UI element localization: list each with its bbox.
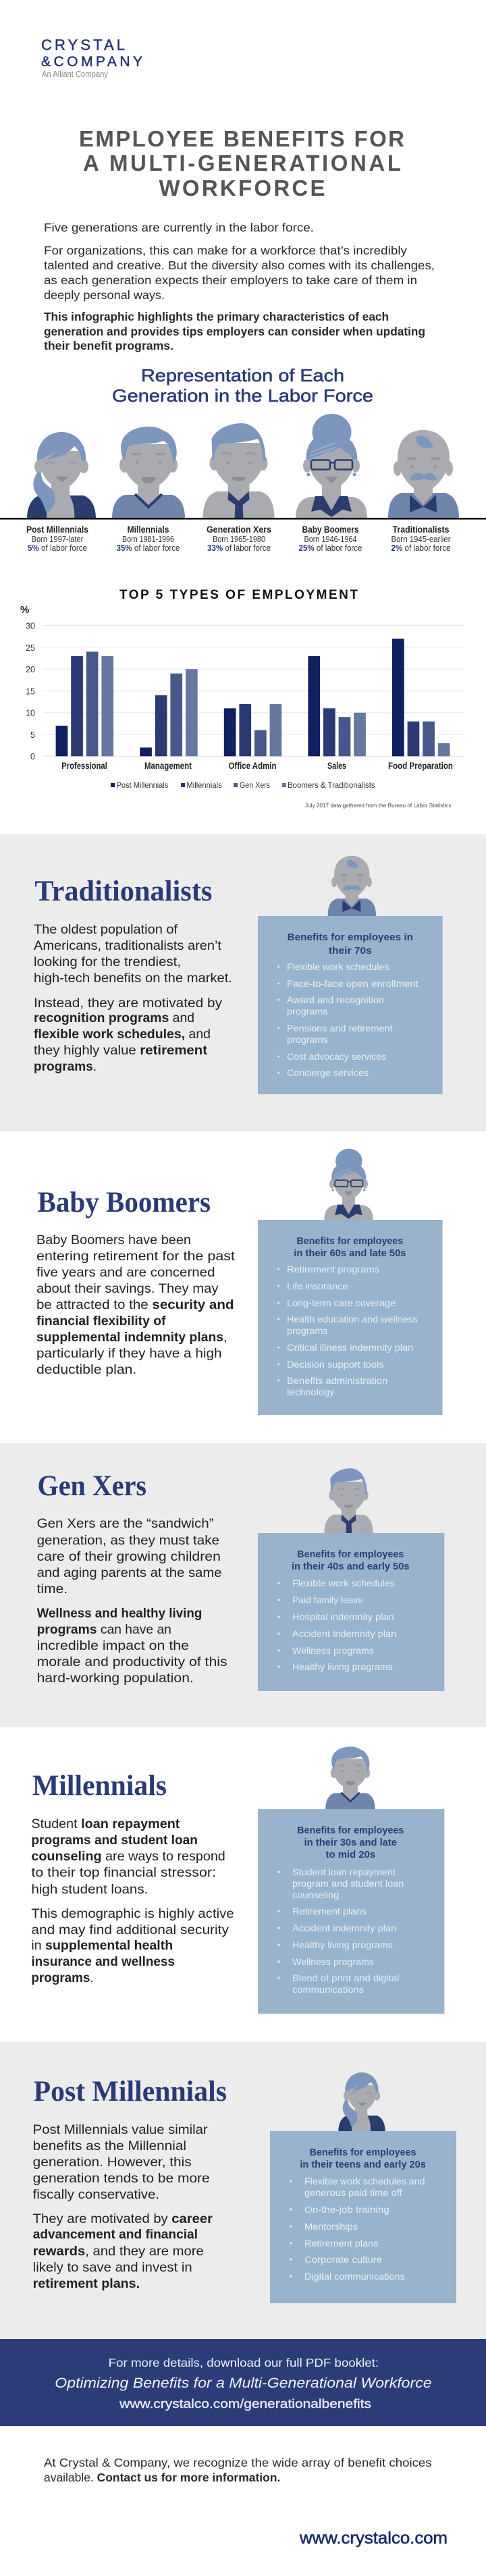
text: millennials description [31,1817,234,1985]
bar chart: top 5 types of employment: 30 [26,621,35,630]
text: post millennials description: Post Millennials value similar [33,2122,208,2137]
intro text: For organizations, this can make for a workforce that’s incredibly [44,244,407,257]
logo [41,36,142,79]
bar chart: top 5 types of employment: 5 [30,730,35,740]
chart legend [111,780,375,790]
text: millennials description: programs. [31,1970,94,1985]
benefits box: millennials [258,1809,444,2014]
text: baby boomers description: deductible plan. [36,1362,136,1377]
figure: gen xer [202,423,274,518]
benefits box: millennials: Accident indemnity plan [292,1923,396,1933]
text: traditionalists description: looking for the trendiest, [34,955,181,969]
bar chart: top 5 types of employment: % [20,604,29,616]
benefits box: post millennials: generous paid time off [304,2187,402,2198]
label: generation xers [207,525,271,553]
text: millennials description: high student loans. [31,1882,148,1897]
banner: download booklet: For more details, download our full PDF booklet: [109,2356,379,2369]
bar chart: top 5 types of employment: 10 [26,709,35,718]
text: post millennials description: rewards, and they are more [33,2244,204,2259]
label: baby boomers: Baby Boomers [302,525,359,535]
heading: millennials: Millennials [32,1770,167,1802]
intro text: generation and provides tips employers can consider when updating [44,325,425,338]
text: traditionalists description [34,922,232,1074]
bar chart: top 5 types of employment: Professional [61,761,107,771]
benefits box: millennials: in their 30s and late [304,1837,397,1848]
text: gen xers description: hard-working population. [37,1671,194,1686]
bar chart: top 5 types of employment [20,604,464,771]
text: millennials description: This demographic is highly active [31,1906,234,1921]
label: millennials: 35% of labor force [116,543,180,553]
benefits box: traditionalists: Flexible work schedules [287,961,389,972]
benefits box: baby boomers: Retirement programs [287,1264,379,1274]
label: millennials: Millennials [127,525,169,535]
label: post millennials: 5% of labor force [28,543,87,553]
text: traditionalists description: flexible work schedules, and [34,1027,211,1042]
text: millennials description: to their top financial stressor: [31,1865,216,1880]
benefits box: millennials: Benefits for employees [297,1825,404,1836]
label: generation xers: Generation Xers [207,525,271,535]
benefits box: gen xers [258,1533,444,1691]
benefits box: post millennials: On-the-job training [304,2204,389,2215]
intro text: as each generation expects their employers to take care of them in [44,273,417,287]
label: generation xers: Born 1965-1980 [213,535,265,544]
label: generation xers: 33% of labor force [207,543,271,553]
benefits box: gen xers: Accident indemnity plan [292,1628,396,1639]
text: millennials description: programs and student loan [31,1833,198,1848]
bar chart: top 5 types of employment: 20 [26,665,35,674]
text: gen xers description: morale and productivity of this [37,1655,227,1669]
generation labels [26,525,451,553]
logo: CRYSTAL [41,36,125,53]
heading: representation of each generation [112,365,373,406]
title [79,126,404,200]
chart legend: Millennials [186,780,222,790]
benefits box: traditionalists: programs [287,1006,328,1017]
bar chart: top 5 types of employment: Management [144,761,192,771]
text: traditionalists description: Americans, traditionalists aren’t [34,938,222,953]
benefits box: baby boomers: Benefits administration [287,1375,387,1386]
chart legend: Post Millennials [117,780,168,790]
benefits box: gen xers: Paid family leave [292,1594,363,1605]
bar chart: top 5 types of employment: Food Preparation [388,761,453,771]
benefits box: millennials: Healthy living programs [292,1939,393,1950]
text: post millennials description [33,2122,213,2291]
benefits box: millennials: to mid 20s [326,1849,375,1860]
text: baby boomers description: supplemental indemnity plans, [36,1330,227,1345]
icon: baby boomer figure [324,1149,373,1220]
chart legend: Boomers & Traditionalists [288,780,375,790]
benefits box: millennials: counseling [292,1889,339,1900]
panel: millennials [0,1727,486,2042]
figure: millennial [112,427,185,518]
heading: post millennials: Post Millennials [34,2076,227,2108]
title: A MULTI-GENERATIONAL [83,151,401,176]
benefits box: baby boomers: in their 60s and late 50s [294,1247,406,1259]
text: gen xers description: care of their growing children [37,1549,221,1564]
heading: traditionalists: Traditionalists [34,876,212,907]
label: baby boomers: 25% of labor force [298,543,362,553]
closing text: At Crystal & Company, we recognize the wide array of benefit choices [44,2456,432,2469]
benefits box: traditionalists: Pensions and retirement [287,1023,393,1034]
text: gen xers description: time. [37,1582,68,1596]
text: gen xers description [37,1516,227,1686]
text: post millennials description: They are motivated by career [33,2211,213,2226]
bar chart: top 5 types of employment: 25 [26,643,35,653]
benefits box: millennials: communications [292,1984,364,1995]
intro text: talented and creative. But the diversity also comes with its challenges, [44,259,435,272]
benefits box: traditionalists: programs [287,1034,328,1045]
text: gen xers description: incredible impact on the [37,1638,189,1653]
banner: download booklet: www.crystalco.com/generationalbenefits [119,2397,371,2411]
benefits box: baby boomers: Decision support tools [287,1359,384,1370]
benefits box: post millennials: Benefits for employees [310,2147,416,2158]
label: traditionalists: Born 1945-earlier [392,535,451,544]
label: traditionalists [392,525,451,553]
label: baby boomers: Born 1946-1964 [304,535,357,544]
benefits box: traditionalists: Award and recognition [287,994,384,1005]
panel: post millennials [0,2042,486,2339]
figure: baby boomer [296,414,367,518]
benefits box: traditionalists: Benefits for employees in [288,932,413,943]
text: baby boomers description [36,1233,236,1377]
bars [56,639,450,756]
figure: post millennial [27,432,96,518]
text: post millennials description: generation. However, this [33,2155,192,2170]
heading: representation of each generation: Generation in the Labor Force [112,385,373,406]
text: baby boomers description: be attracted to the security and [36,1297,234,1312]
panel: traditionalists [0,834,486,1131]
text: traditionalists description: recognition programs and [34,1011,194,1025]
benefits box: baby boomers: Long-term care coverage [287,1297,396,1308]
benefits box: gen xers: Wellness programs [292,1645,374,1656]
banner: download booklet: Optimizing Benefits for a Multi-Generational Workforce [55,2376,432,2391]
heading: representation of each generation: Representation of Each [141,365,344,385]
label: traditionalists: 2% of labor force [392,543,451,553]
label: millennials: Born 1981-1996 [122,535,174,544]
text: post millennials description: advancement and financial [33,2227,198,2242]
closing text: available. Contact us for more information. [44,2471,280,2484]
benefits box: post millennials: Flexible work schedules and [304,2176,425,2186]
icon: post millennial figure [338,2072,385,2131]
bar chart: top 5 types of employment: Sales [327,761,346,771]
website url: www.crystalco.com [299,2529,448,2548]
text: millennials description: counseling are ways to respond [31,1849,225,1864]
text: gen xers description: programs can have an [37,1622,171,1637]
text: millennials description: insurance and wellness [31,1954,175,1969]
bar chart: top 5 types of employment: Office Admin [228,761,277,771]
label: baby boomers [298,525,362,553]
text: millennials description: and may find additional security [31,1923,229,1937]
intro text [44,221,435,352]
label: post millennials: Post Millennials [26,525,88,535]
text: post millennials description: benefits as the Millennial [33,2139,186,2153]
label: post millennials [26,525,88,553]
benefits box: millennials: Wellness programs [292,1956,374,1967]
benefits box: millennials: Student loan repayment [292,1867,396,1877]
bar chart: top 5 types of employment: 0 [30,752,35,761]
text: post millennials description: likely to save and invest in [33,2260,192,2275]
icon: millennial figure [325,1747,375,1809]
panel: baby boomers [0,1131,486,1443]
text: baby boomers description: five years and are concerned [36,1265,215,1280]
text: gen xers description: Gen Xers are the “sandwich” [37,1516,214,1531]
chart source note: July 2017 data gathered from the Bureau of Labor Statistics [305,802,451,809]
text: traditionalists description: Instead, they are motivated by [34,996,222,1011]
text: gen xers description: Wellness and healthy living [37,1606,202,1621]
text: post millennials description: generation tends to be more [33,2171,210,2186]
text: post millennials description: retirement plans. [33,2276,140,2291]
benefits box: traditionalists [258,916,443,1094]
text: traditionalists description: The oldest population of [34,922,178,937]
intro text: their benefit programs. [44,339,173,352]
text: millennials description: in supplemental health [31,1938,173,1953]
benefits box: baby boomers: Critical illness indemnity plan [287,1342,413,1353]
text: baby boomers description: entering retirement for the past [36,1249,236,1264]
label: traditionalists: Traditionalists [393,525,450,535]
text: gen xers description: and aging parents at the same [37,1565,222,1580]
benefits box: baby boomers: Life insurance [287,1281,348,1291]
benefits box: baby boomers: Health education and wellness [287,1314,418,1324]
heading: baby boomers: Baby Boomers [38,1187,211,1218]
icon: gen xer figure [324,1468,373,1533]
logo: &COMPANY [41,54,142,70]
benefits box: millennials: Retirement plans [292,1906,367,1916]
banner: download booklet [0,2339,486,2426]
text: traditionalists description: they highly value retirement [34,1043,208,1058]
text: gen xers description: generation, as they must take [37,1533,219,1548]
benefits box: gen xers: Healthy living programs [292,1661,393,1672]
chart title: TOP 5 TYPES OF EMPLOYMENT [119,588,358,602]
title: EMPLOYEE BENEFITS FOR [79,126,404,151]
title: WORKFORCE [159,176,325,200]
benefits box: post millennials: Corporate culture [304,2254,382,2265]
benefits box: gen xers: Hospital indemnity plan [292,1611,394,1622]
text: baby boomers description: about their savings. They may [36,1281,219,1296]
benefits box: baby boomers [258,1220,443,1415]
benefits box: traditionalists: Cost advocacy services [287,1051,386,1062]
text: baby boomers description: Baby Boomers have been [36,1233,191,1247]
benefits box: baby boomers: programs [287,1325,328,1336]
benefits box: post millennials: in their teens and early 20s [300,2159,426,2170]
intro text: Five generations are currently in the labor force. [44,221,314,234]
text: traditionalists description: high-tech benefits on the market. [34,971,232,986]
benefits box: gen xers: in their 40s and early 50s [292,1561,410,1572]
benefits box: millennials: program and student loan [292,1878,404,1889]
benefits box: post millennials: Mentorships [304,2221,358,2232]
label: post millennials: Born 1997-later [31,535,84,544]
benefits box: post millennials: Digital communications [304,2271,405,2282]
text: millennials description: Student loan repayment [31,1817,180,1831]
text: baby boomers description: particularly if they have a high [36,1346,222,1361]
logo: An Alliant Company [42,70,109,79]
text: baby boomers description: financial flexibility of [36,1314,166,1329]
intro text: deeply personal ways. [44,288,165,302]
benefits box: gen xers: Benefits for employees [297,1549,404,1560]
figure: traditionalist [388,430,459,518]
intro text: This infographic highlights the primary characteristics of each [44,310,389,323]
benefits box: post millennials: Retirement plans [304,2238,378,2249]
illustration: generation figures [27,414,459,518]
closing text [44,2456,432,2484]
heading: gen xers: Gen Xers [38,1470,146,1502]
bar chart: top 5 types of employment: 15 [26,687,35,697]
text: traditionalists description: programs. [34,1059,97,1074]
benefits box: baby boomers: Benefits for employees [296,1235,403,1247]
benefits box: traditionalists: their 70s [329,945,372,957]
benefits box: gen xers: Flexible work schedules [292,1578,395,1588]
benefits box: traditionalists: Face-to-face open enrollment [287,978,418,989]
benefits box: post millennials [270,2131,456,2303]
benefits box: baby boomers: technology [287,1387,334,1397]
benefits box: traditionalists: Concierge services [287,1067,369,1078]
label: millennials [116,525,180,553]
chart legend: Gen Xers [240,780,270,790]
icon: traditionalist figure [328,856,376,916]
benefits box: millennials: Blend of print and digital [292,1973,399,1983]
panel: gen xers [0,1443,486,1727]
text: post millennials description: fiscally conservative. [33,2187,159,2202]
